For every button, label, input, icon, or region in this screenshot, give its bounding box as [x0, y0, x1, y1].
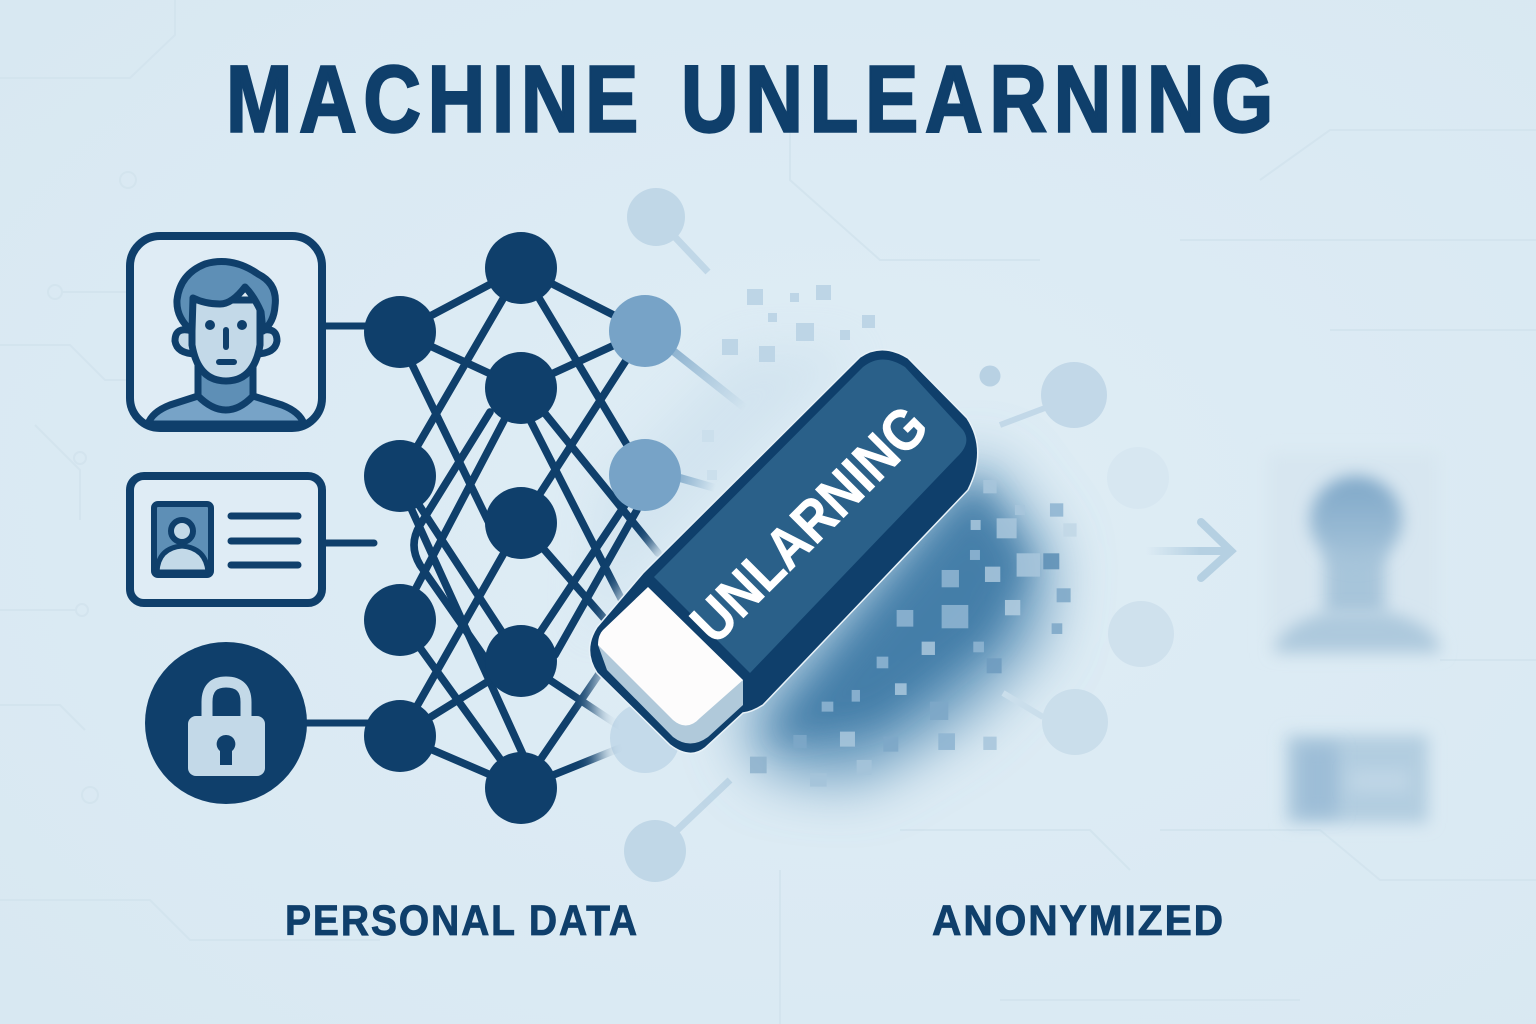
pixels above eraser [702, 285, 875, 480]
eraser label: UNLARNING [678, 393, 941, 656]
dissolving pixels [750, 480, 1077, 787]
arrow head [1201, 522, 1231, 578]
card photo [1298, 745, 1338, 815]
portrait backdrop [1267, 453, 1439, 653]
card body [1286, 735, 1428, 823]
eyes [205, 320, 247, 330]
mouth [219, 359, 234, 365]
label: anonymized: ANONYMIZED [932, 897, 1225, 945]
title word: unlearning: UNLEARNING [681, 46, 1280, 152]
sleeve top face [654, 360, 966, 673]
connector [300, 720, 400, 726]
id text lines [231, 516, 298, 565]
faded nodes right [980, 362, 1174, 755]
node upper right [1000, 362, 1107, 428]
frame [130, 236, 322, 428]
shirt [148, 396, 304, 424]
hair [177, 262, 275, 331]
neck [198, 362, 253, 410]
neural network nodes [364, 232, 681, 824]
card frame [130, 476, 322, 603]
face [192, 300, 260, 381]
id photo [154, 504, 211, 575]
keyhole [217, 735, 235, 765]
connector [325, 540, 374, 546]
title word: machine: MACHINE [226, 46, 645, 152]
nose [223, 330, 229, 347]
node mid right faint [1107, 447, 1169, 509]
node bottom right [1003, 689, 1108, 755]
ears [175, 330, 277, 354]
card lines [1350, 770, 1410, 792]
blurred neck [1325, 545, 1385, 615]
dissolving nodes behind eraser [610, 188, 730, 882]
panel: lock badge [145, 642, 400, 804]
eraser body [590, 350, 978, 753]
title [226, 46, 1280, 152]
node lower right [1108, 601, 1174, 667]
lock body [188, 716, 265, 776]
haze beside eraser [590, 350, 860, 640]
neural network edges [400, 268, 658, 788]
badge circle [145, 642, 307, 804]
blurred portrait [1267, 453, 1441, 653]
blurred shoulders [1274, 612, 1441, 652]
shackle [207, 682, 246, 720]
faded node lower left [610, 703, 680, 773]
arrow shaft [1146, 547, 1228, 555]
panel: person portrait [130, 236, 400, 428]
faded node top [627, 188, 708, 272]
eraser tip face [598, 587, 743, 726]
small dot [980, 366, 1000, 386]
label: personal data: PERSONAL DATA [285, 897, 639, 945]
blurred id card [1286, 735, 1428, 823]
eraser tip shade [598, 645, 743, 744]
dark blur cloud under eraser [740, 465, 1050, 780]
connector [325, 322, 400, 330]
arrow [1146, 522, 1231, 578]
panel: id card [130, 476, 374, 603]
fading outgoing connectors [672, 350, 745, 488]
eraser [590, 350, 978, 753]
faded node bottom [624, 780, 730, 882]
blurred head [1310, 476, 1402, 564]
